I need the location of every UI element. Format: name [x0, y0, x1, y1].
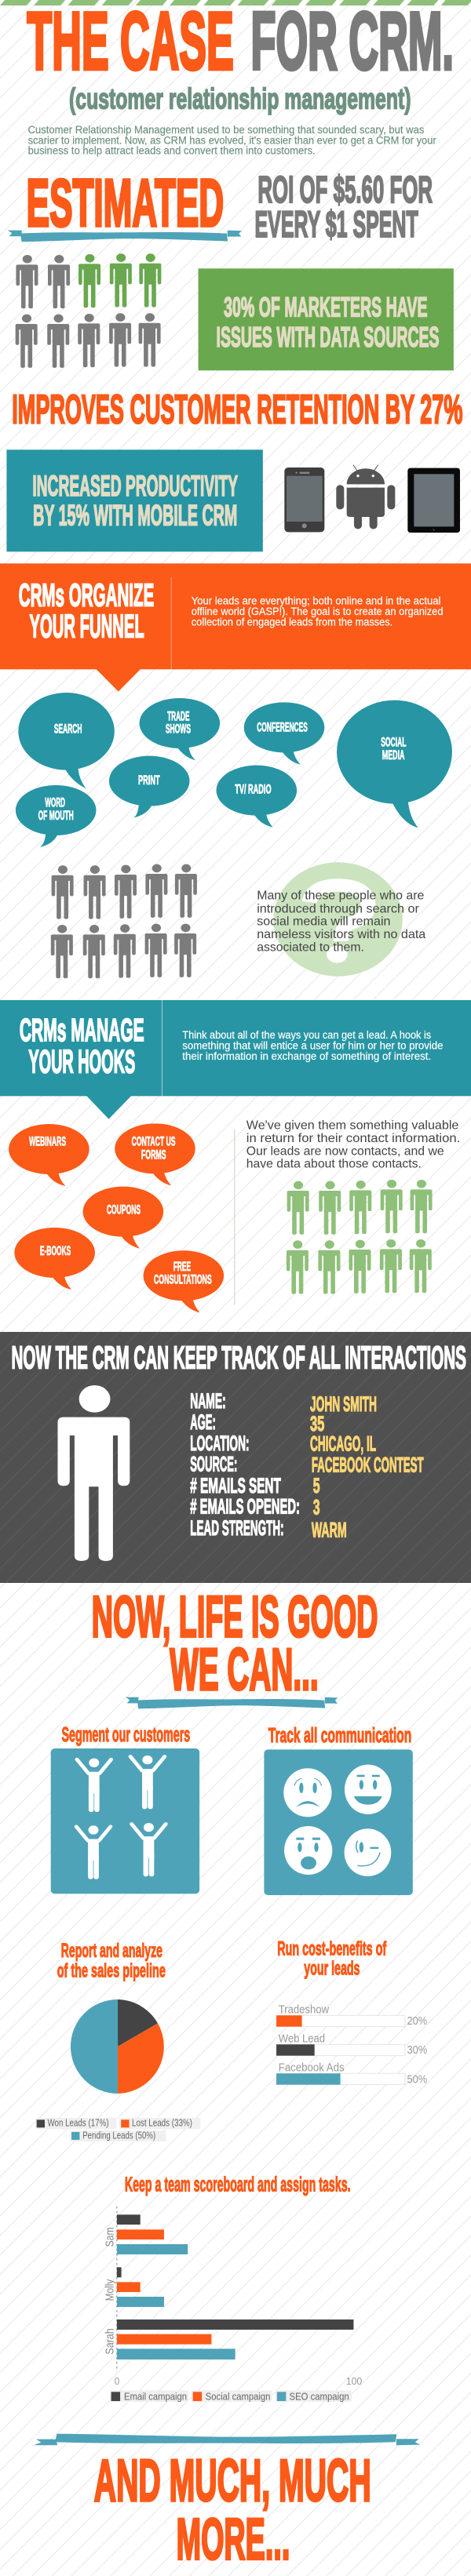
bar chart legend: SEO campaign: [290, 2391, 349, 2402]
text: ESTIMATED: [27, 166, 224, 241]
bubble: social media: MEDIA: [382, 747, 404, 762]
bubble: word of mouth: OF MOUTH: [38, 807, 74, 823]
icon: question mark: [273, 862, 403, 977]
text: nameless visitors: Many of these people who are: [257, 889, 424, 902]
contact record values: 3: [313, 1496, 320, 1519]
icon: tablet: [407, 468, 460, 533]
bar chart: team scoreboard: Sam: [103, 2227, 115, 2247]
text: nameless visitors: social media will remain: [257, 914, 391, 928]
panel: mobile productivity: BY 15% WITH MOBILE CRM: [33, 500, 237, 532]
text: # EMAILS OPENED:: [190, 1495, 300, 1519]
contact record values: CHICAGO, IL: [310, 1432, 376, 1456]
bubble: e-books: [14, 1228, 95, 1290]
pie chart: [71, 1999, 164, 2094]
panel: CRMs manage your hooks: YOUR HOOKS: [28, 1043, 135, 1080]
contact record values: 35: [310, 1413, 324, 1435]
bubble: print: [109, 756, 189, 818]
bubble: tv and radio: TV/ RADIO: [235, 781, 272, 796]
bubble: webinars: [9, 1124, 89, 1186]
estimated heading with ribbon: [8, 166, 242, 242]
bubble: tv and radio: [217, 766, 297, 828]
bubble: search: SEARCH: [54, 721, 82, 736]
contact record labels: # EMAILS SENT: [190, 1475, 281, 1497]
panel: segment customers icons: [51, 1748, 199, 1894]
bubble: word of mouth: WORD: [45, 795, 65, 810]
contact record labels: [190, 1390, 300, 1540]
text: Segment our customers: [61, 1723, 190, 1746]
ROI statistic: [255, 169, 433, 245]
bubble: search: [18, 693, 115, 788]
progress bars: Facebook Ads: [279, 2062, 345, 2074]
icon: contact person: [57, 1385, 130, 1561]
ribbon: [34, 2434, 420, 2445]
report heading: [57, 1940, 166, 1981]
bar chart: team scoreboard: 0: [115, 2376, 119, 2388]
text: nameless visitors: nameless visitors with no data: [257, 927, 426, 941]
ribbon: [126, 1697, 338, 1708]
closing heading: [94, 2448, 371, 2572]
contact record values: WARM: [312, 1519, 347, 1542]
text: leads become contacts: Our leads are now contacts, and we: [246, 1144, 444, 1158]
pie legend: Lost Leads (33%): [132, 2117, 192, 2128]
bubble: social media: SOCIAL: [381, 734, 406, 749]
bubble: word of mouth: [16, 785, 96, 847]
panel background: interaction tracking: [0, 1332, 471, 1583]
panel: CRMs manage your hooks: [0, 1000, 471, 1119]
panel: CRMs organize your funnel: collection of engaged leads from the masses.: [192, 616, 392, 628]
text: leads become contacts: in return for their contact information.: [246, 1131, 460, 1145]
bar chart legend: Social campaign: [206, 2391, 270, 2402]
progress bars: 50%: [407, 2073, 427, 2086]
contact record values: 5: [313, 1475, 320, 1497]
contact record labels: NAME:: [190, 1390, 226, 1413]
pie legend: Won Leads (17%): [47, 2117, 109, 2128]
bar chart: team scoreboard: Molly: [103, 2279, 115, 2301]
bubble: free consultations: CONSULTATIONS: [154, 1272, 212, 1286]
text: nameless visitors: introduced through search or: [257, 901, 419, 915]
bubble: contact us forms: FORMS: [141, 1147, 166, 1162]
intro paragraph: business to help attract leads and convert them into customers.: [28, 145, 316, 157]
panel: marketers data sources: [199, 268, 454, 370]
pie legend: Pending Leads (50%): [82, 2130, 155, 2141]
people icons: anonymous visitors: [51, 864, 197, 978]
bubble: trade shows: TRADE: [167, 708, 189, 723]
heading: life is good: [92, 1584, 378, 1703]
contact record labels: SOURCE:: [190, 1453, 237, 1476]
text: leads become contacts: have data about those contacts.: [246, 1157, 422, 1170]
text: leads become contacts: [246, 1118, 460, 1170]
bubble: coupons: COUPONS: [107, 1202, 141, 1217]
progress bars: [276, 2004, 427, 2086]
text: nameless visitors: associated to them.: [257, 941, 364, 954]
panel: CRMs organize your funnel: YOUR FUNNEL: [30, 608, 144, 645]
report heading: Report and analyze: [61, 1940, 162, 1962]
bubble: trade shows: SHOWS: [166, 721, 191, 736]
icon: android robot: [336, 465, 395, 529]
contact record labels: LOCATION:: [190, 1432, 250, 1455]
text: nameless visitors: [257, 889, 426, 954]
bubble: coupons: [83, 1187, 163, 1249]
cost-benefit heading: your leads: [304, 1956, 360, 1979]
cost-benefit heading: [277, 1937, 387, 1979]
panel: CRMs organize your funnel: CRMs ORGANIZE: [19, 577, 154, 613]
report heading: of the sales pipeline: [57, 1959, 166, 1981]
contact record labels: AGE:: [190, 1411, 216, 1434]
bar chart: team scoreboard: Sarah: [103, 2328, 115, 2355]
bubble: contact us forms: CONTACT US: [132, 1133, 175, 1148]
intro paragraph: [28, 124, 436, 157]
panel: CRMs manage your hooks: CRMs MANAGE: [20, 1013, 144, 1048]
bubble: free consultations: [144, 1250, 224, 1312]
panel: mobile productivity: [6, 449, 263, 551]
contact record values: [310, 1393, 424, 1542]
bubble: e-books: E-BOOKS: [40, 1243, 71, 1258]
bar chart: team scoreboard: [103, 2207, 362, 2388]
bubble: free consultations: FREE: [173, 1258, 191, 1274]
icon: smartphone: [284, 468, 324, 532]
bar chart: team scoreboard: 100: [346, 2376, 362, 2388]
progress bars: Web Lead: [279, 2032, 325, 2045]
bar chart legend: [110, 2390, 352, 2402]
bubble: social media: [337, 700, 452, 828]
bubble: trade shows: [140, 698, 220, 760]
bubble: webinars: WEBINARS: [29, 1133, 66, 1148]
contact record values: JOHN SMITH: [310, 1393, 377, 1416]
panel: CRMs organize your funnel: [0, 563, 471, 692]
people icons: known contacts: [287, 1180, 433, 1294]
people icons: 3 of 10 green: [16, 253, 161, 368]
closing heading: MORE...: [177, 2506, 290, 2572]
progress bars: 30%: [407, 2044, 427, 2057]
bubble: conferences: [244, 702, 324, 765]
bubble: contact us forms: [115, 1123, 195, 1185]
progress bars: Tradeshow: [279, 2004, 330, 2016]
panel: communication faces: [264, 1749, 413, 1895]
pie legend: [35, 2117, 200, 2141]
contact record labels: LEAD STRENGTH:: [190, 1517, 284, 1540]
bubble: conferences: CONFERENCES: [257, 719, 308, 734]
bar chart legend: Email campaign: [124, 2391, 187, 2402]
bubble: print: PRINT: [138, 772, 160, 788]
progress bars: 20%: [407, 2015, 427, 2028]
